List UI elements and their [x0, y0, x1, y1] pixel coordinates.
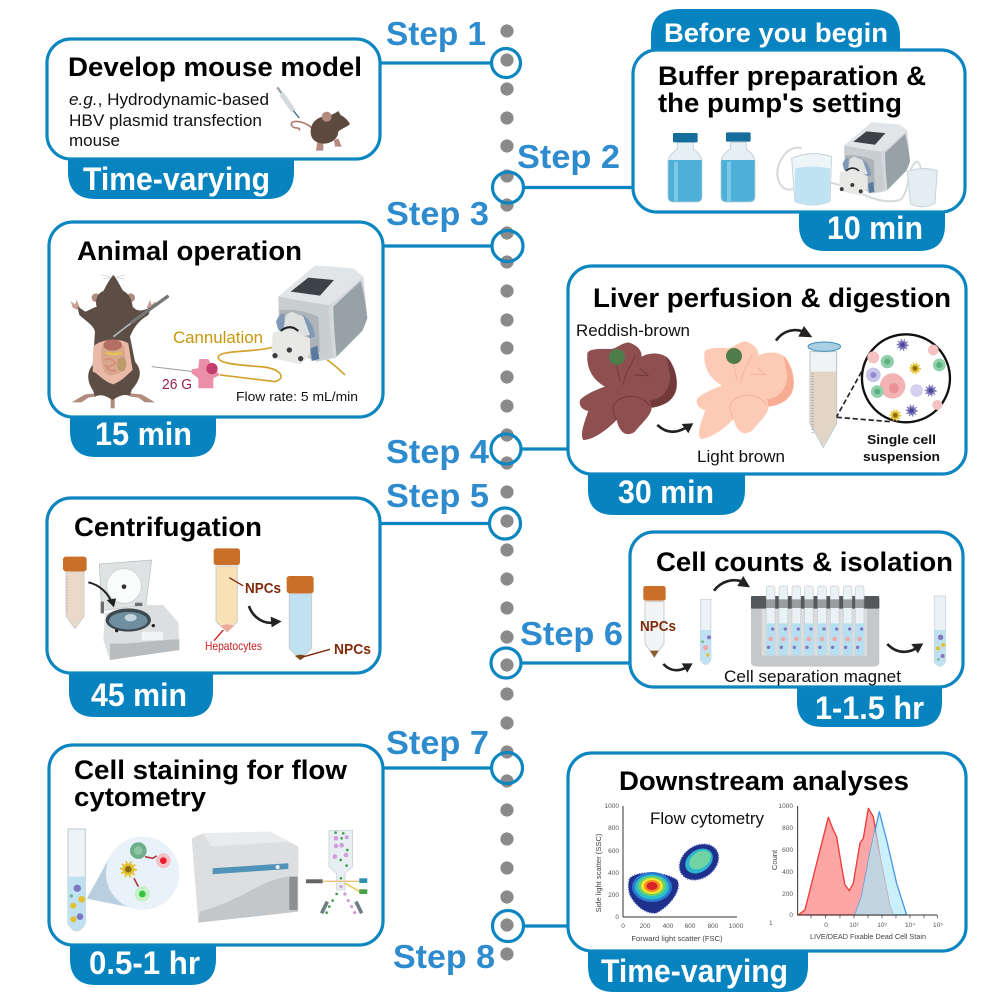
icon: cannula and tubing: [152, 347, 345, 388]
chart: flow cytometry scatter plot: 0: [621, 923, 625, 930]
icon: perfused liver: [697, 341, 794, 439]
heading: develop mouse model: Develop mouse model: [68, 52, 362, 82]
icon: fluidics sorting diagram: [306, 831, 367, 914]
panel: cell staining for flow cytometry: [49, 745, 383, 985]
chart: flow cytometry scatter plot: 200: [608, 892, 619, 899]
label: reddish-brown: Reddish-brown: [576, 322, 690, 340]
chart: live/dead histogram: 10⁵: [933, 922, 943, 929]
label: NPCs tube: NPCs: [640, 619, 676, 635]
label: single cell suspension: suspension: [863, 449, 940, 464]
icon: single cell suspension magnifier: [837, 334, 950, 422]
chart: flow cytometry scatter plot: 400: [608, 870, 619, 877]
duration tag: 45 min: 45 min: [91, 677, 187, 713]
text: mouse model description: [69, 90, 269, 150]
heading: buffer preparation: Buffer preparation &: [658, 61, 926, 91]
icon: tube and centrifuge: [63, 557, 179, 660]
heading: cell staining: Cell staining for flow: [74, 755, 348, 785]
icon: dissected mouse with forceps: [71, 275, 167, 408]
icon: tube with NPC pellet: [287, 576, 330, 660]
icon: cell separation magnet rack: [751, 586, 879, 667]
duration tag: 0.5-1 hr: 0.5-1 hr: [89, 945, 200, 981]
chart: flow cytometry scatter plot: 200: [640, 923, 651, 930]
panel: centrifugation: [47, 498, 380, 717]
chart: flow cytometry scatter plot: 0: [615, 914, 619, 921]
heading: cell staining: cytometry: [74, 782, 206, 812]
chart: flow cytometry scatter plot: 600: [608, 848, 619, 855]
label: NPCs lower: NPCs: [334, 642, 371, 658]
label: single cell suspension: Single cell: [867, 432, 936, 447]
step labels: Step 4: [386, 434, 489, 471]
icon: small test tube: [700, 599, 711, 665]
arrow: liver to tube: [776, 326, 812, 341]
tag: before you begin: Before you begin: [664, 18, 888, 48]
arrows: transfer between tubes and magnet: [663, 576, 923, 673]
label: cannulation: Cannulation: [173, 328, 263, 347]
label: 26 G: 26 G: [162, 376, 192, 393]
icon: tube with NPCs and hepatocytes: [214, 548, 243, 641]
chart: flow cytometry scatter plot: 600: [685, 923, 696, 930]
heading: centrifugation: Centrifugation: [74, 512, 262, 542]
chart: flow cytometry scatter plot: Forward light scatter (FSC): [631, 934, 723, 943]
duration tag: 30 min: 30 min: [618, 474, 714, 510]
chart: live/dead histogram: 200: [782, 891, 793, 898]
icon: buffer bottles: [668, 132, 755, 202]
chart: live/dead histogram: Count: [770, 849, 779, 870]
panel: buffer preparation: [633, 9, 965, 251]
step labels: Step 5: [386, 478, 489, 515]
duration tag: time-varying: Time-varying: [601, 953, 788, 989]
icon: reddish-brown liver: [580, 342, 677, 440]
arrow: liver to light liver: [657, 423, 693, 433]
label: single cell suspension: [863, 432, 940, 464]
text: mouse model description: e.g., Hydrodynamic-based: [69, 90, 269, 109]
text: mouse model description: mouse: [69, 131, 120, 150]
panel: animal operation: [49, 222, 383, 457]
chart: live/dead histogram: 400: [782, 869, 793, 876]
icon: peristaltic pump: [272, 266, 367, 364]
chart: live/dead histogram: 1: [769, 920, 773, 927]
chart: flow cytometry scatter plot: 800: [708, 923, 719, 930]
chart: flow cytometry scatter plot: [594, 803, 744, 943]
step labels: Step 7: [386, 725, 489, 762]
label: light brown: Light brown: [697, 447, 785, 466]
chart: live/dead histogram: [769, 803, 943, 941]
duration tag: time-varying: Time-varying: [83, 161, 270, 197]
timeline: step markers and connectors: [380, 48, 633, 942]
step labels: Step 6: [520, 616, 623, 653]
chart: live/dead histogram: 800: [782, 825, 793, 832]
text: mouse model description: HBV plasmid transfection: [69, 111, 262, 130]
chart: live/dead histogram: 600: [782, 847, 793, 854]
label: NPCs upper: NPCs: [245, 581, 281, 597]
step labels: Step 3: [386, 196, 489, 233]
panel: liver perfusion and digestion: [568, 266, 966, 515]
icon: purified cells tube: [934, 596, 946, 666]
chart: live/dead histogram: 1000: [779, 803, 793, 810]
duration tag: 10 min: 10 min: [827, 210, 923, 246]
chart: live/dead histogram: 0: [789, 912, 793, 919]
heading: downstream analyses: Downstream analyses: [619, 766, 909, 796]
step labels: Step 1: [386, 16, 486, 53]
timeline: dotted spine: [500, 24, 514, 961]
chart: flow cytometry scatter plot: Side light scatter (SSC): [594, 833, 603, 912]
icon: NPC tube: [643, 586, 666, 657]
heading: animal operation: Animal operation: [77, 236, 302, 266]
chart: live/dead histogram: 10⁴: [905, 922, 915, 929]
duration tag: 15 min: 15 min: [95, 416, 192, 452]
panel: downstream analyses: [568, 753, 966, 992]
chart: flow cytometry scatter plot: 1000: [729, 923, 744, 930]
chart: flow cytometry scatter plot: 800: [608, 825, 619, 832]
heading: liver perfusion: Liver perfusion & digestion: [593, 283, 951, 313]
icon: stained cells in tube: [68, 829, 179, 931]
chart: live/dead histogram: 0: [824, 922, 828, 929]
panel: cell counts and isolation: [630, 532, 963, 727]
chart: flow cytometry scatter plot: 1000: [605, 803, 619, 810]
heading: buffer preparation: [658, 61, 926, 118]
label: flow rate: Flow rate: 5 mL/min: [236, 389, 358, 404]
chart: live/dead histogram: 10³: [877, 922, 888, 929]
icon: syringe and mouse: [277, 87, 350, 151]
heading: cell counts: Cell counts & isolation: [656, 547, 953, 577]
label: flow cytometry: Flow cytometry: [650, 810, 765, 828]
chart: flow cytometry scatter plot: 400: [663, 923, 674, 930]
chart: live/dead histogram: 10²: [849, 922, 860, 929]
heading: cell staining: [74, 755, 348, 812]
label: hepatocytes: Hepatocytes: [205, 639, 262, 653]
step labels: Step 8: [393, 939, 495, 976]
icon: suspension tube: [808, 342, 841, 447]
icon: beakers and pump: [777, 123, 937, 207]
panel: develop mouse model: [47, 39, 380, 199]
duration tag: 1-1.5 hr: 1-1.5 hr: [815, 690, 924, 726]
step labels: [386, 16, 623, 976]
chart: live/dead histogram: LIVE/DEAD Fixable Dead Cell Stain: [810, 932, 926, 941]
heading: buffer preparation: the pump's setting: [658, 88, 902, 118]
icon: flow cytometer: [192, 832, 298, 923]
label: cell separation magnet: Cell separation magnet: [724, 667, 901, 686]
arrow: to pellet tube: [249, 606, 282, 627]
step labels: Step 2: [517, 139, 620, 176]
